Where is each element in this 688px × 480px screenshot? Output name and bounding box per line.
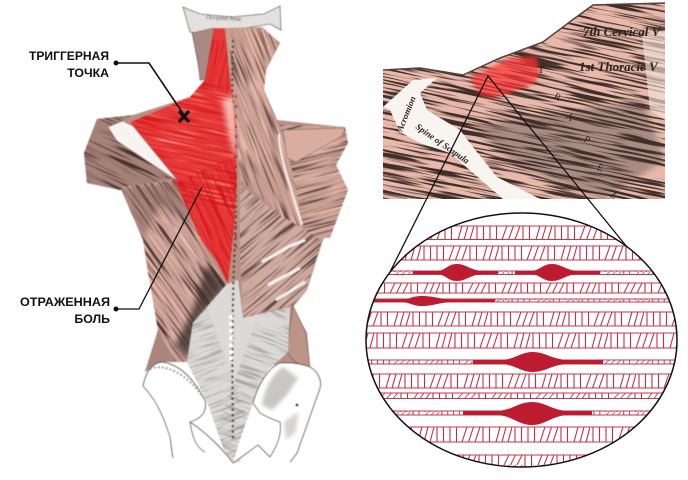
trapezius highlighted red [130, 28, 238, 284]
gray shaded fibres [470, 100, 665, 199]
occipital bone [183, 6, 281, 33]
occipital bone: Occipital bone [206, 15, 242, 23]
panel: trapezius close-up [383, 2, 665, 199]
label: trigger point: ТОЧКА [67, 66, 109, 80]
anatomical annotations: Z [608, 189, 618, 202]
circular muscle fibre magnification [360, 213, 685, 467]
right ilium [233, 363, 321, 463]
left ilium [143, 362, 233, 463]
anatomical annotations: 7th Cervical V [583, 24, 662, 39]
anatomical annotations: Acromion [394, 95, 418, 134]
panel top edge [383, 3, 665, 75]
left flank muscle [145, 330, 176, 372]
X trigger point marker [179, 111, 189, 122]
leader line to trigger point [114, 60, 184, 115]
label: referred pain: БОЛЬ [74, 312, 110, 326]
zoom lines [390, 76, 627, 272]
label: trigger point: ТРИГГЕРНАЯ [29, 49, 109, 63]
spine [231, 40, 236, 440]
anatomical annotations: R [552, 91, 563, 104]
anatomical annotations [394, 24, 662, 202]
neck muscles, left side [192, 28, 214, 80]
magnification outline [366, 213, 677, 467]
muscle fibre bands [360, 226, 685, 467]
red highlighted spot [470, 56, 540, 98]
anatomical annotations: A [564, 111, 576, 125]
label: trigger point [29, 49, 109, 80]
scapular spine [108, 121, 178, 181]
left arm muscle [84, 114, 172, 191]
lumbar fascia [186, 280, 290, 463]
scapula spine and acromion [383, 78, 540, 199]
latissimus dorsi [121, 180, 226, 362]
neck muscles, right side [224, 27, 322, 240]
right rib muscles [240, 186, 322, 318]
label: referred pain: ОТРАЖЕННАЯ [20, 295, 110, 309]
body base silhouette [84, 27, 348, 440]
leader line to referred pain [114, 187, 202, 312]
anatomical annotations: 1st Thoracic V [579, 59, 659, 74]
anatomical annotations: T [538, 65, 544, 76]
back anatomy illustration [83, 5, 349, 464]
right flank muscle [287, 306, 310, 368]
contraction knots [366, 264, 603, 425]
right shoulder muscles [277, 124, 349, 239]
anatomical annotations: E [594, 162, 605, 175]
label: referred pain [20, 295, 110, 326]
anatomical annotations: Spine of Scapula [414, 121, 472, 166]
anatomical annotations: P [582, 134, 592, 147]
pale edge at right [642, 30, 665, 120]
